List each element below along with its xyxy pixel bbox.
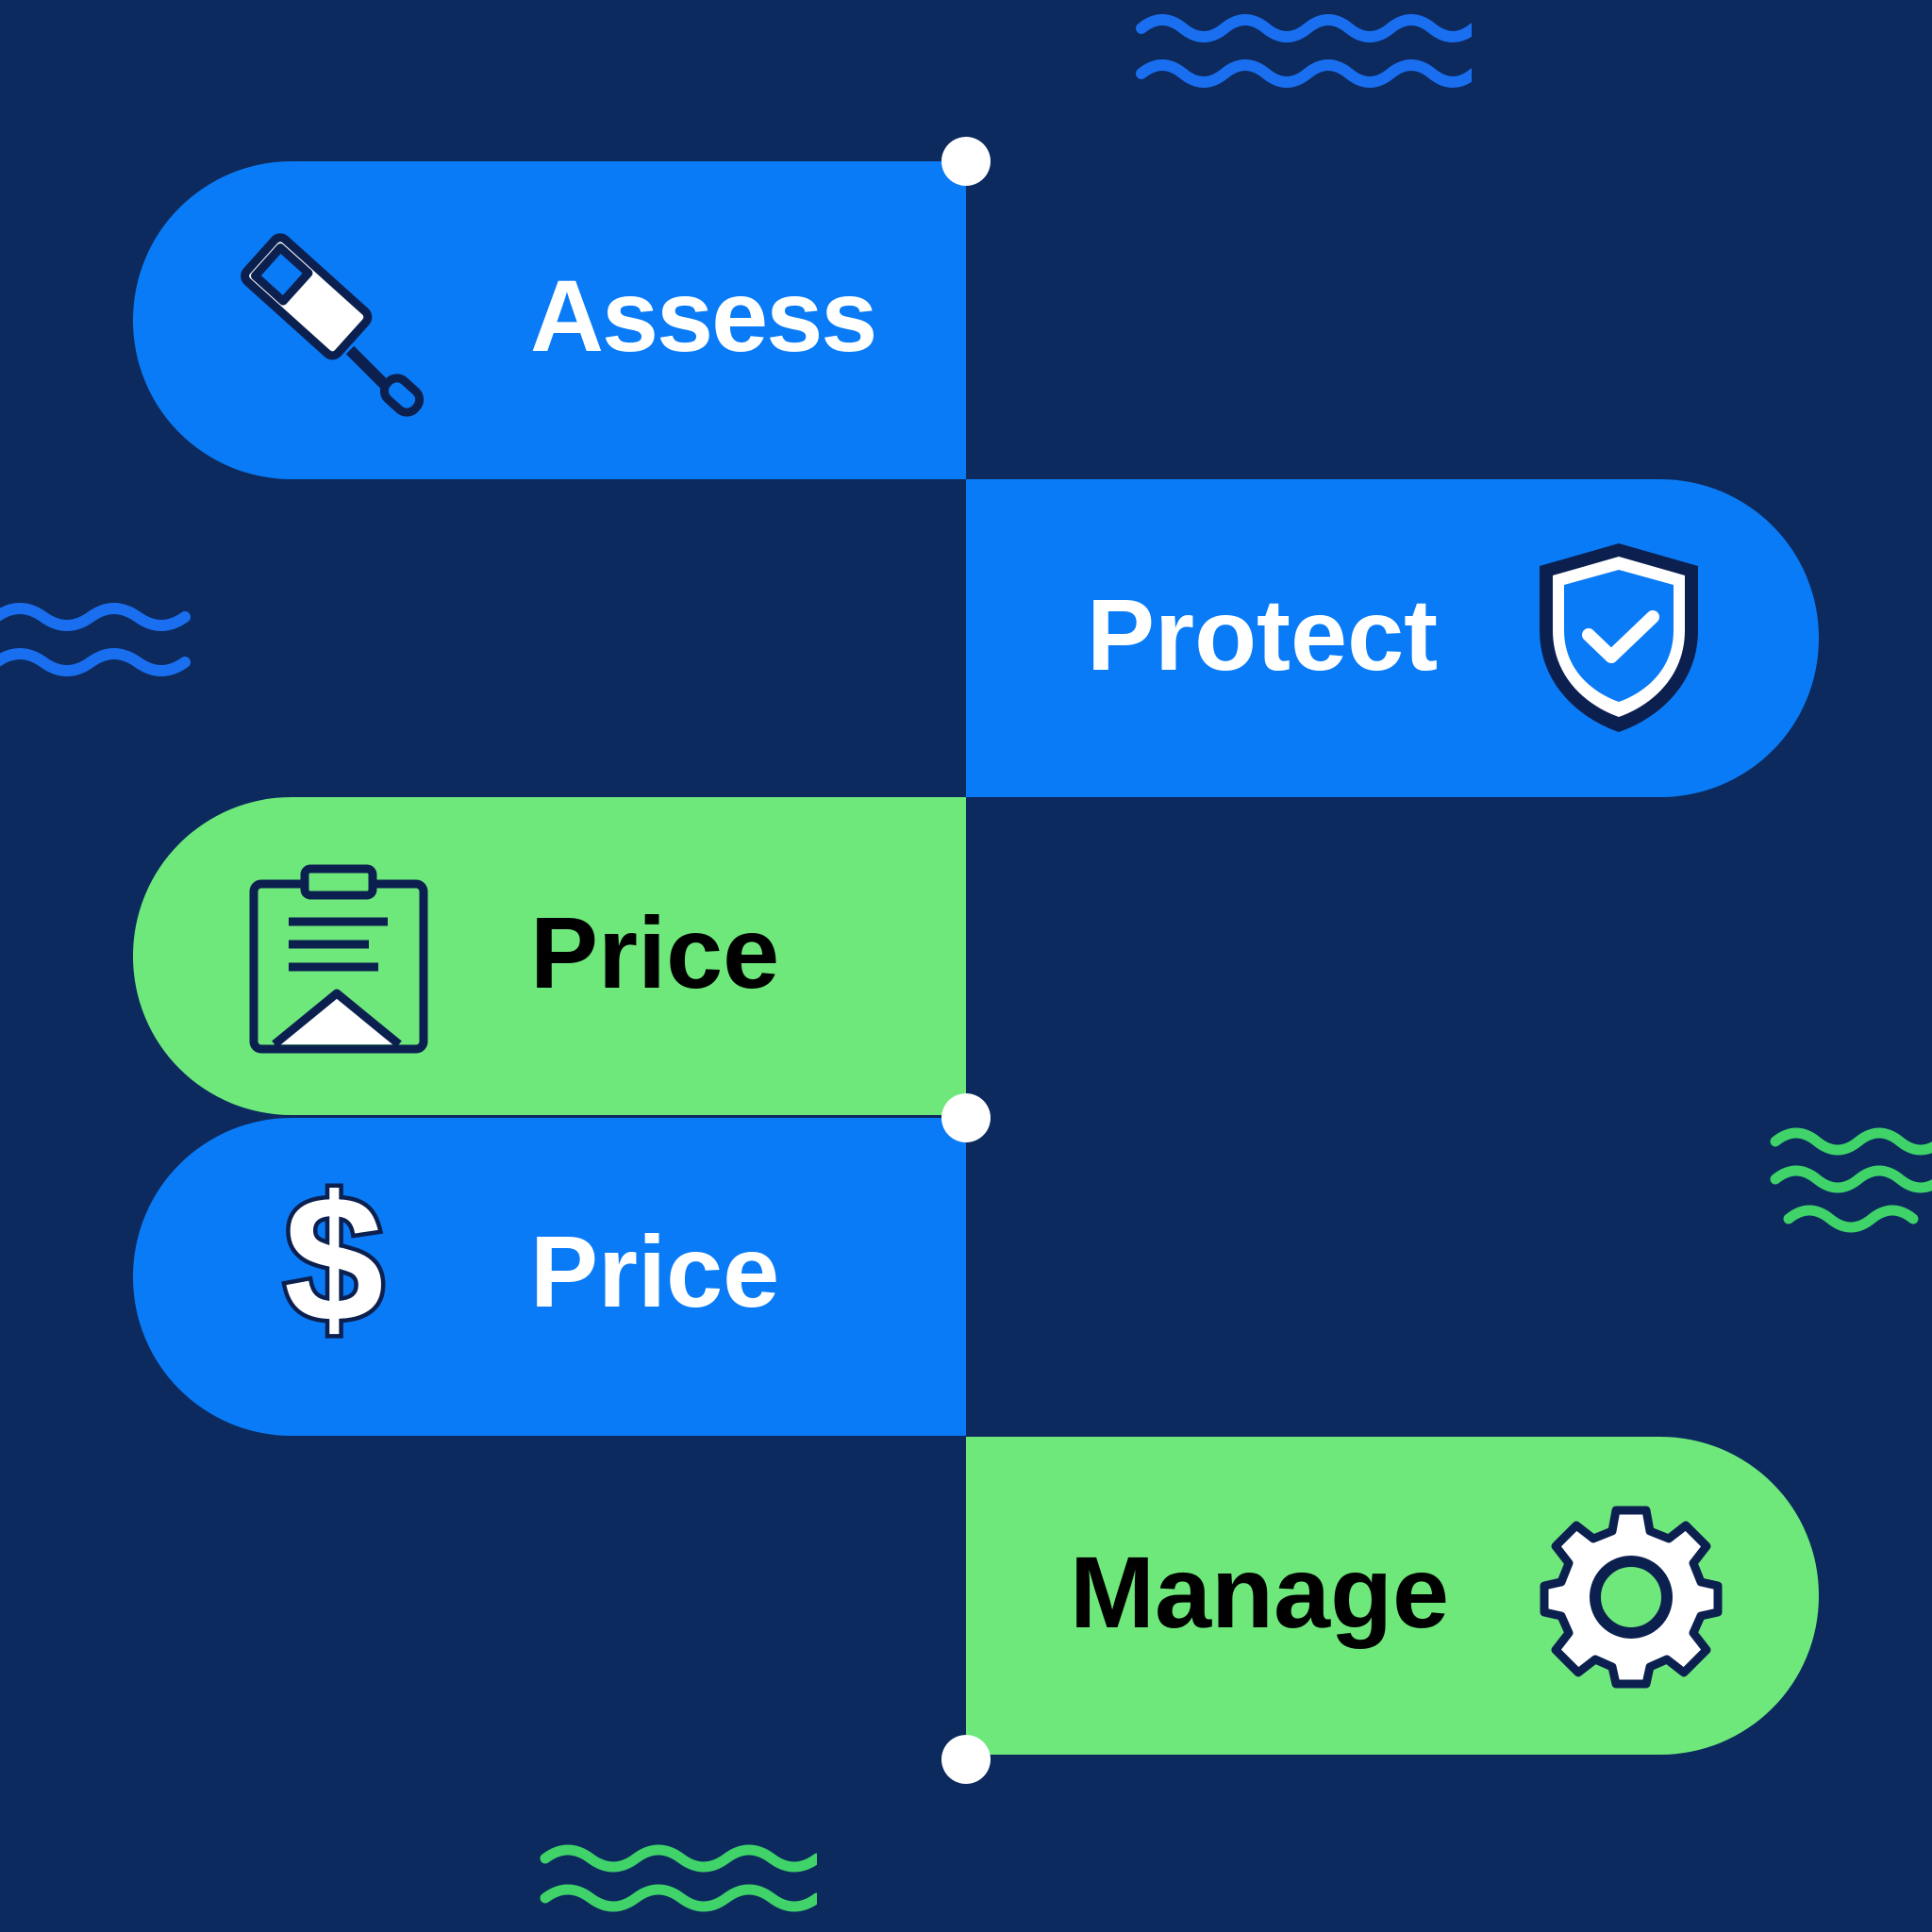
- label: Assess: Assess: [530, 258, 875, 373]
- icon: tool: [241, 233, 425, 417]
- panel: price blue: [133, 1118, 966, 1436]
- label: Manage: Manage: [1070, 1535, 1449, 1649]
- wave: bottom green: [540, 1845, 817, 1911]
- panel: price green: [133, 797, 966, 1115]
- label: Price: Price: [530, 1214, 779, 1328]
- icon: clipboard: [249, 864, 428, 1053]
- wave: right green: [1770, 1128, 1932, 1232]
- wave: left: [0, 603, 191, 676]
- panel: manage: [966, 1437, 1819, 1755]
- icon: dollar: $: [284, 1159, 384, 1359]
- connector dots: [941, 137, 991, 1784]
- label: Protect: Protect: [1087, 577, 1438, 691]
- icon: gear: [1540, 1506, 1723, 1689]
- wave: top: [1136, 14, 1472, 88]
- icon: shield: [1540, 543, 1698, 732]
- label: Price: Price: [530, 895, 779, 1009]
- panel: assess: [133, 161, 966, 479]
- panel: protect: [966, 479, 1819, 797]
